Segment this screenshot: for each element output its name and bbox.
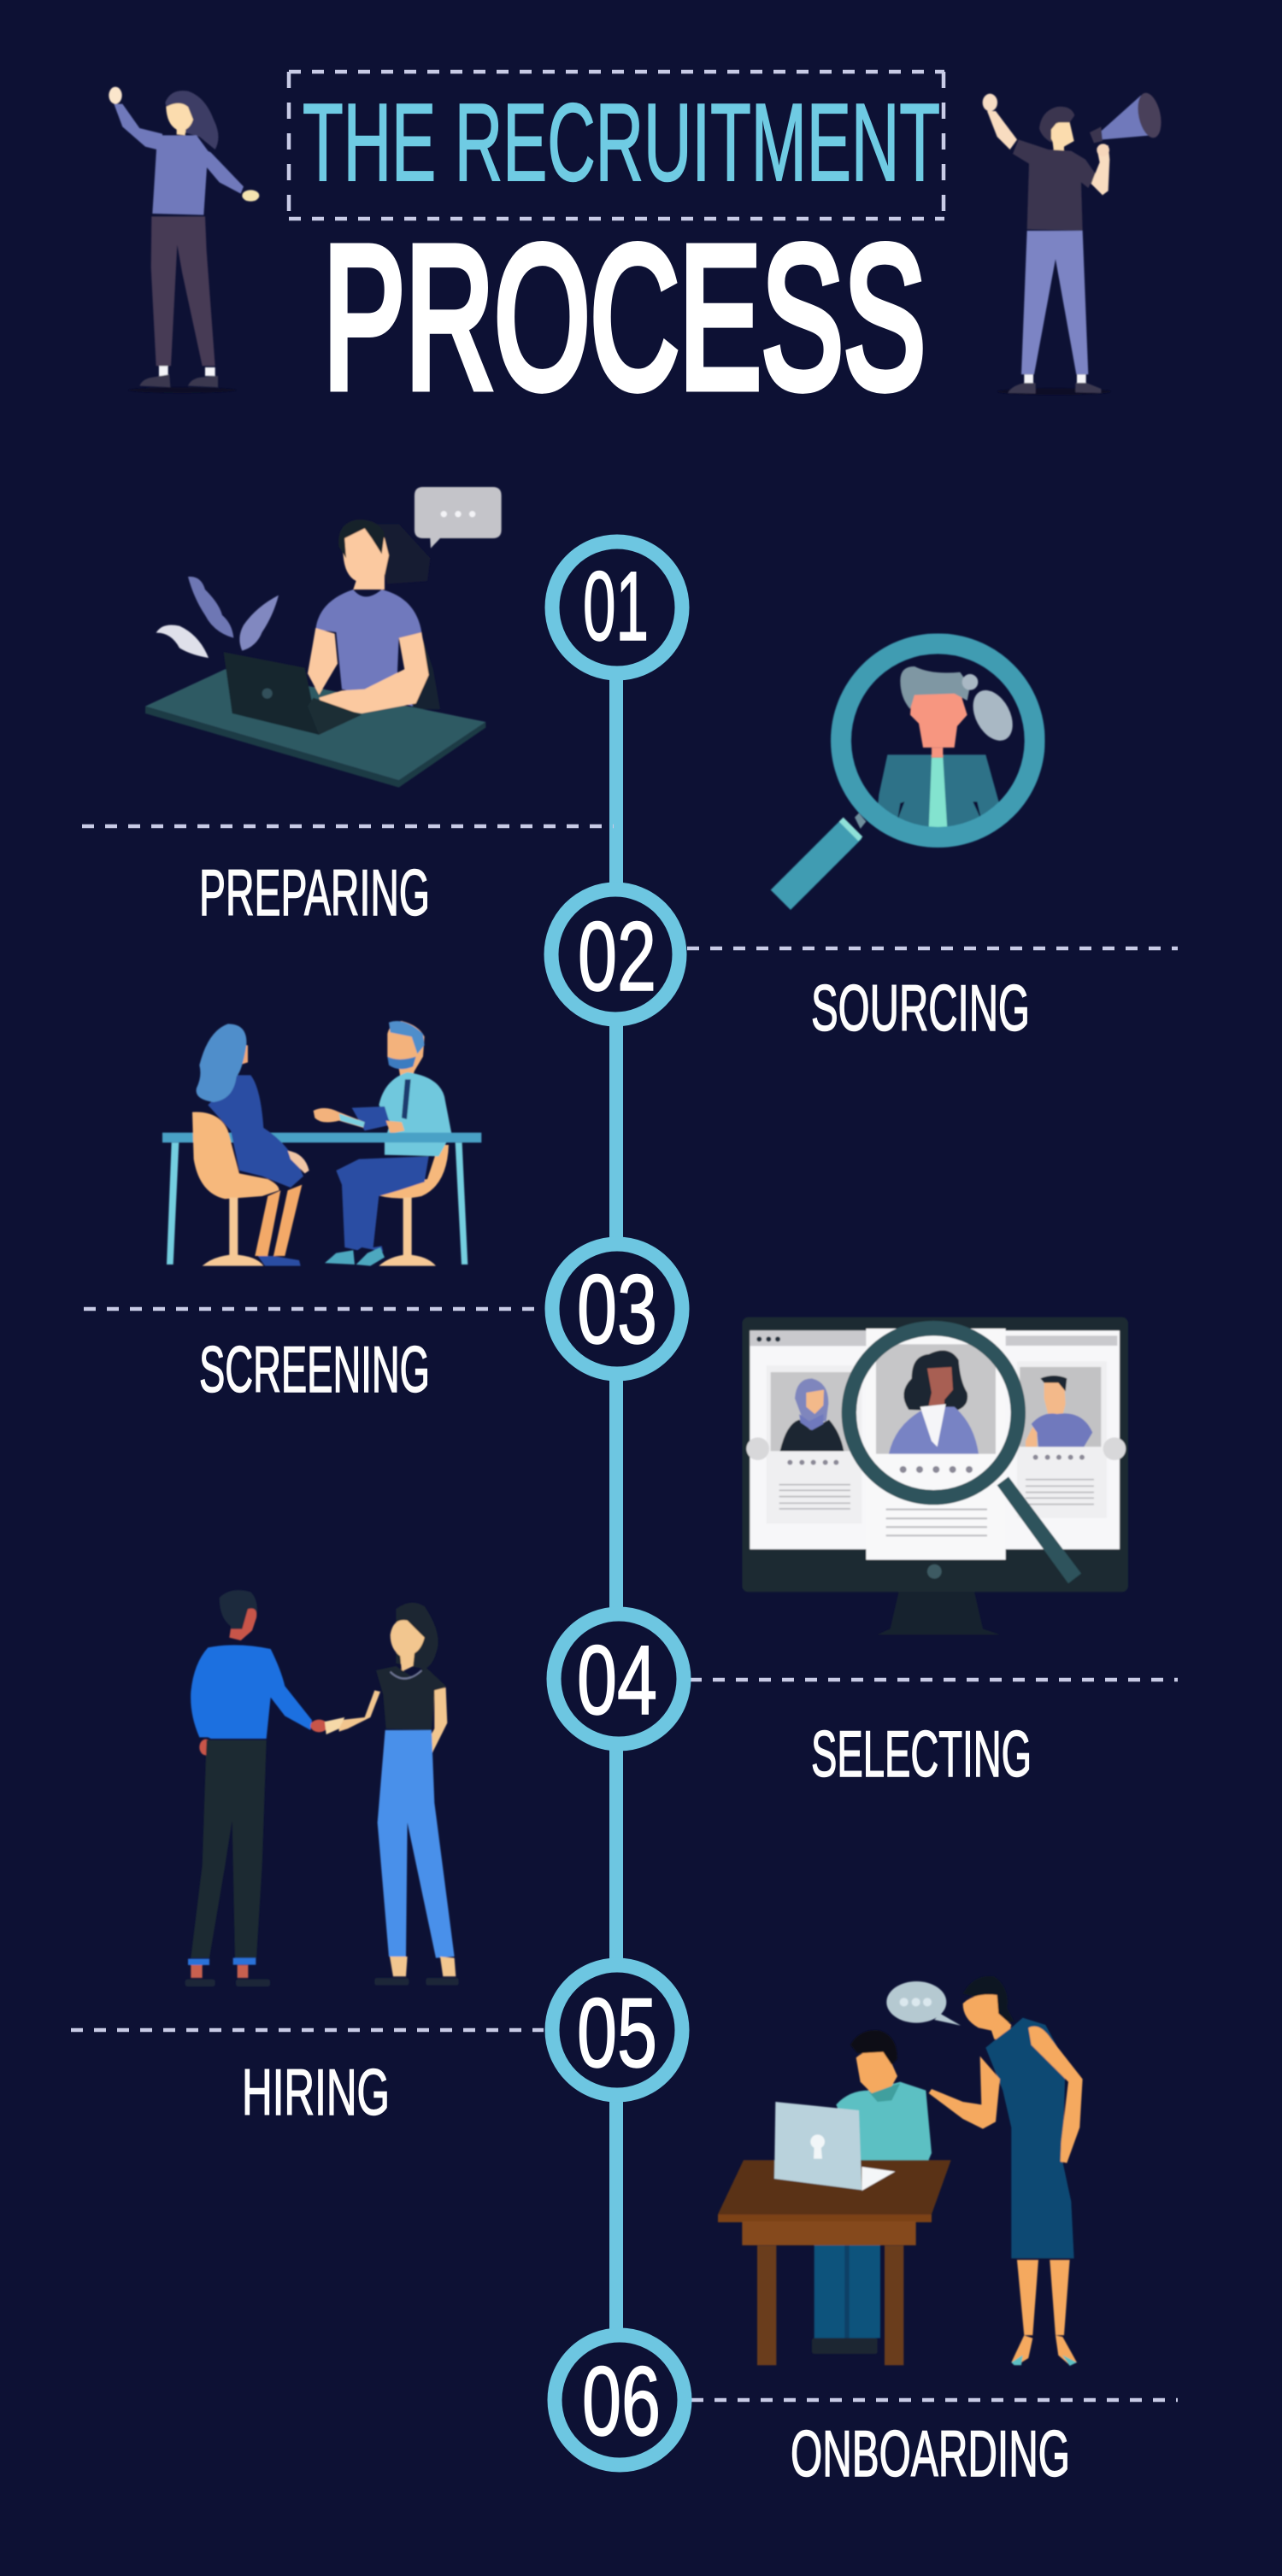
label: onboarding: ONBOARDING (791, 2418, 1070, 2491)
label: screening: SCREENING (199, 1334, 430, 1406)
connector: dashed line step 1 (82, 824, 614, 828)
figure: man with megaphone (983, 91, 1165, 395)
marker: step 01: 01 (583, 552, 649, 661)
figure: woman waving (109, 87, 259, 393)
label: sourcing: SOURCING (811, 972, 1030, 1045)
connector: dashed line step 4 (690, 1678, 1178, 1681)
marker: step 04: 04 (577, 1626, 657, 1735)
label: selecting: SELECTING (811, 1718, 1032, 1791)
illustration: handshake (185, 1590, 459, 1986)
marker: step 05: 05 (577, 1979, 657, 2088)
connector: dashed line step 5 (71, 2028, 544, 2032)
connector: dashed line step 3 (84, 1307, 544, 1311)
label: preparing: PREPARING (199, 857, 430, 930)
marker: step 03 (552, 1244, 682, 1374)
timeline: connecting line (609, 675, 623, 2332)
marker: step 05 (552, 1965, 682, 2095)
illustration: woman at laptop (145, 487, 502, 788)
connector: dashed line step 6 (691, 2398, 1178, 2402)
illustration: monitor with candidate profiles (742, 1317, 1128, 1634)
marker: step 06: 06 (582, 2347, 661, 2456)
connector: dashed line step 2 (687, 947, 1178, 950)
marker: step 06 (555, 2335, 685, 2465)
marker: step 01 (552, 542, 682, 673)
marker: step 02 (551, 889, 679, 1019)
marker: step 04 (554, 1614, 684, 1744)
illustration: interview at a table (162, 1021, 481, 1266)
title box: dashed frame (289, 72, 944, 219)
marker: step 03: 03 (577, 1255, 657, 1364)
marker: step 02: 02 (578, 902, 656, 1012)
illustration: onboarding at a desk (718, 1976, 1083, 2366)
illustration: magnifier over candidate (771, 643, 1035, 910)
label: hiring: HIRING (242, 2057, 390, 2129)
